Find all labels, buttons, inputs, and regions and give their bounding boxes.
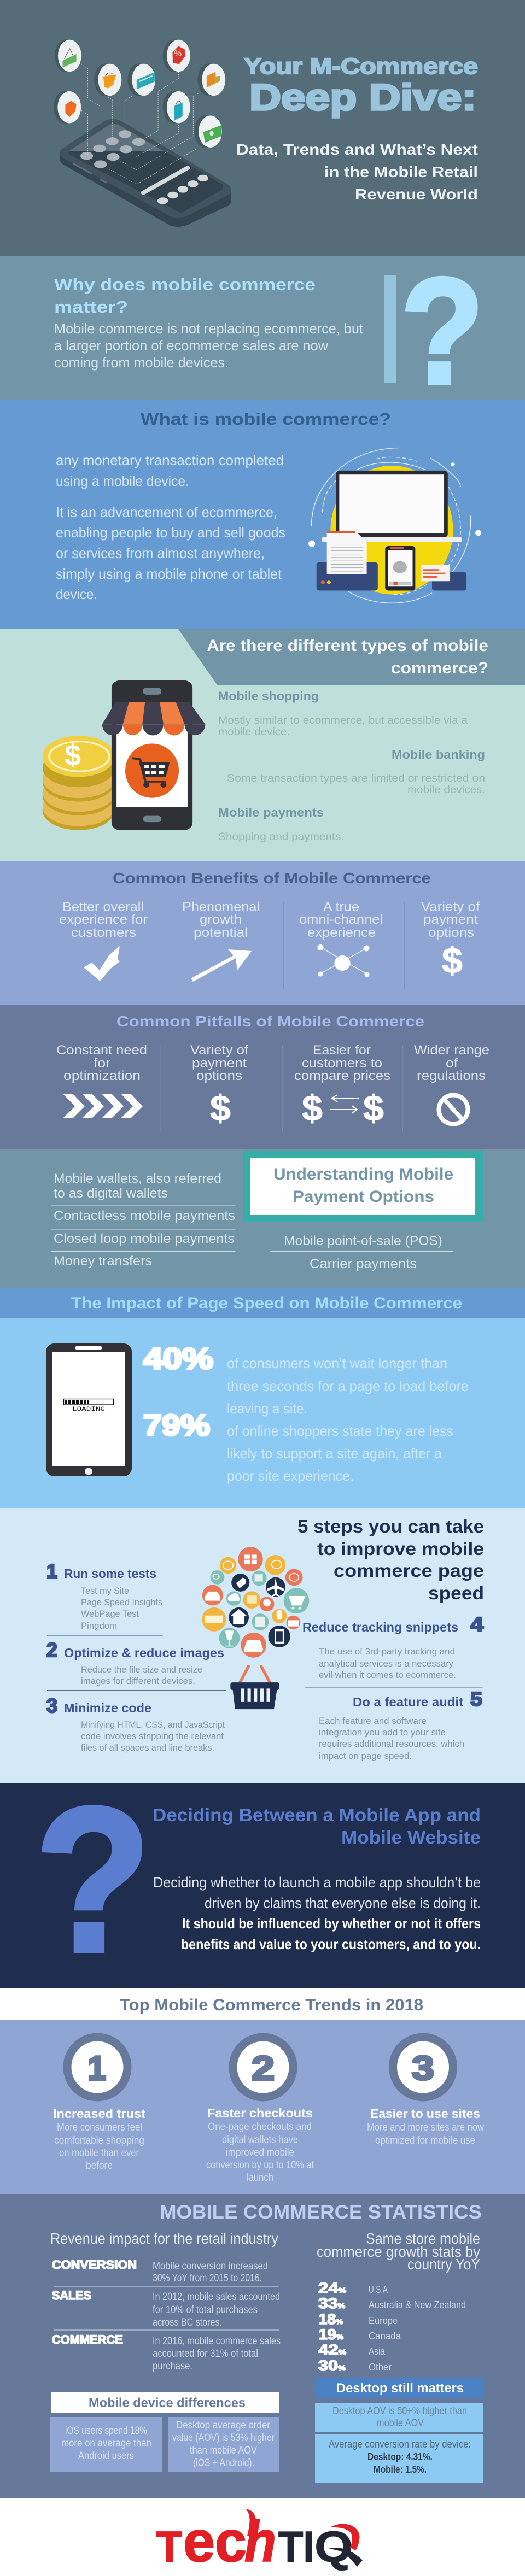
text block: [56, 452, 285, 602]
benefit: growth: [182, 900, 260, 982]
subtitle: [236, 141, 478, 203]
stat: 40%: leaving a site.: [227, 1400, 307, 1417]
benefit: omni-channel: [299, 900, 383, 977]
growth stats by country: commerce growth stats by: [317, 2243, 480, 2260]
subtitle: Data, Trends and What’s Next: [236, 141, 478, 158]
text block: using a mobile device.: [56, 473, 189, 489]
illustration: store phone and coins: $: [65, 739, 81, 772]
heading: What is mobile commerce?: [141, 409, 391, 429]
revenue impact table: accounted for 31% of total: [153, 2348, 258, 2360]
heading: 5 steps you can take: [298, 1516, 484, 1536]
desktop still matters: Desktop still matters: [336, 2381, 464, 2396]
trend 3: 3: [412, 2050, 434, 2087]
heading: Common Pitfalls of Mobile Commerce: [116, 1013, 424, 1030]
item: mobile payments: [218, 806, 344, 843]
growth stats by country: 18%: [318, 2311, 343, 2327]
heading: matter?: [54, 297, 128, 316]
heading banner: Are there different types of mobile: [207, 637, 488, 655]
trend 2: digital wallets have: [222, 2134, 298, 2146]
stat: 79%: poor site experience.: [227, 1468, 354, 1484]
step 1: Pingdom: [81, 1621, 117, 1631]
text block: driven by claims that everyone else is doing it.: [205, 1895, 481, 1911]
pitfall: payment options: Variety of: [190, 1043, 248, 1058]
benefit: payment options: [421, 900, 480, 981]
icon: phone loading: LOADING: [72, 1406, 105, 1413]
trend 2: Faster checkouts: [207, 2106, 313, 2120]
revenue impact table: across BC stores.: [153, 2317, 222, 2328]
benefit: better experience: [59, 900, 148, 981]
step 1: Page Speed Insights: [81, 1597, 162, 1607]
step 4: evil when it comes to ecommerce.: [319, 1670, 456, 1680]
growth stats by country: Other: [369, 2362, 392, 2373]
device differences: [50, 2392, 279, 2472]
step 1: [46, 1560, 163, 1635]
benefit: payment options: payment: [423, 912, 478, 927]
item: mobile banking: [227, 748, 485, 796]
step 5: Do a feature audit: [353, 1695, 463, 1709]
stat: 79%: of online shoppers state they are less: [227, 1423, 453, 1439]
subtitle: in the Mobile Retail: [324, 163, 478, 180]
text block: It should be influenced by whether or not it offers: [182, 1915, 481, 1932]
benefit: omni-channel: experience: [307, 925, 376, 940]
revenue impact table: In 2012, mobile sales accounted: [153, 2291, 280, 2303]
heading: to improve mobile: [317, 1539, 484, 1559]
benefit: better experience: experience for: [59, 912, 148, 927]
heading: commerce page: [334, 1560, 484, 1581]
logo: TechTIQ: T: [156, 2522, 182, 2571]
logo: TechTIQ: TI: [278, 2522, 314, 2571]
text block: enabling people to buy and sell goods: [56, 524, 285, 541]
heading: [153, 1805, 481, 1847]
trend 3: More and more sites are now: [367, 2122, 484, 2133]
revenue impact table: In 2016, mobile commerce sales: [153, 2336, 281, 2347]
item: mobile banking: Mobile banking: [392, 748, 485, 761]
illustration: store phone and coins: [43, 680, 205, 830]
icon: phone loading: [46, 1343, 132, 1476]
step 3: code involves stripping the relevant: [81, 1731, 224, 1741]
trend 3: [367, 2033, 484, 2146]
growth stats by country: Europe: [369, 2315, 398, 2326]
subtitle: Revenue World: [355, 186, 478, 203]
revenue impact table: for 10% of total purchases: [153, 2304, 258, 2316]
heading: Common Benefits of Mobile Commerce: [113, 870, 431, 887]
step 5: Each feature and software: [319, 1716, 427, 1726]
logo: TechTIQ: h: [244, 2509, 276, 2574]
item: mobile shopping: Mostly similar to ecommerce, but accessible via a: [218, 715, 468, 726]
stat: 79%: [143, 1409, 453, 1484]
item: mobile shopping: Mobile shopping: [218, 689, 319, 703]
list: left options: [51, 1171, 235, 1269]
step 5: impact on page speed.: [319, 1751, 412, 1761]
desktop still matters: Mobile: 1.5%.: [374, 2464, 427, 2475]
panel: statistics: [0, 2194, 525, 2498]
benefit: payment options: Variety of: [421, 900, 480, 914]
step 1: Test my Site: [81, 1586, 129, 1596]
text block: a larger portion of ecommerce sales are now: [54, 337, 328, 354]
growth stats by country: Australia & New Zealand: [369, 2299, 466, 2310]
trend 1: Increased trust: [53, 2106, 145, 2121]
heading box: Payment Options: [293, 1188, 434, 1206]
text block: any monetary transaction completed: [56, 452, 284, 468]
trend 2: One-page checkouts and: [208, 2121, 312, 2133]
benefit: growth: Phenomenal: [182, 900, 260, 914]
panel: why does mobile commerce matter: [0, 247, 525, 415]
trend 2: 2: [252, 2050, 275, 2087]
growth stats by country: [317, 2230, 480, 2374]
text block: benefits and value to your customers, and to you.: [181, 1936, 481, 1952]
pitfall: regulations: [414, 1043, 489, 1124]
text block: Mobile commerce is not replacing ecommerce, but: [54, 320, 364, 337]
heading: impact of page speed: [0, 1288, 525, 1318]
step 5: 5: [470, 1688, 482, 1710]
step 2: Reduce the file size and resize: [81, 1664, 202, 1675]
text block: or services from almost anywhere,: [56, 545, 265, 561]
pitfall: compare prices: $: [363, 1088, 384, 1128]
icon: question mark: ?: [35, 1764, 151, 1995]
logo: TechTIQ: Q: [314, 2522, 353, 2571]
growth stats by country: country YoY: [407, 2256, 480, 2273]
text block: [153, 1874, 481, 1952]
logo: TechTIQ: [0, 2498, 525, 2576]
stat: 40%: of consumers won’t wait longer than: [227, 1355, 447, 1371]
list: left options: Money transfers: [54, 1254, 152, 1269]
title: Deep Dive:: [249, 77, 476, 118]
step 2: [46, 1639, 226, 1691]
pitfall: compare prices: Easier for: [313, 1043, 371, 1058]
step 4: The use of 3rd-party tracking and: [319, 1646, 455, 1657]
heading: Mobile Website: [341, 1827, 481, 1847]
heading: impact of page speed: The Impact of Page Speed on Mobile Commerce: [71, 1294, 462, 1312]
heading: [298, 1516, 484, 1603]
item: mobile shopping: mobile device.: [218, 726, 290, 738]
growth stats by country: 24 %: [318, 2280, 347, 2296]
heading box: Understanding Mobile: [273, 1165, 453, 1183]
desktop still matters: Desktop: 4.31%.: [368, 2451, 433, 2462]
panel: trends: [0, 2020, 525, 2194]
list: left options: Contactless mobile payments: [54, 1208, 235, 1223]
step 4: analytical services is a necessary: [319, 1658, 453, 1669]
device differences: value (AOV) is 53% higher: [172, 2432, 275, 2444]
device differences: than mobile AOV: [190, 2445, 257, 2456]
pitfall: regulations: of: [446, 1056, 458, 1071]
panel: header: [0, 0, 525, 256]
pitfall: compare prices: customers to: [302, 1056, 382, 1071]
device differences: (iOS + Android).: [193, 2457, 254, 2469]
list: right options: Mobile point-of-sale (POS): [284, 1234, 442, 1248]
benefit: better experience: customers: [71, 925, 136, 940]
revenue impact table: COMMERCE: [52, 2333, 123, 2346]
heading banner: commerce?: [391, 659, 488, 677]
step 1: Run some tests: [64, 1566, 156, 1581]
heading box: [243, 1151, 483, 1222]
trend 2: conversion by up to 10% at: [206, 2160, 314, 2171]
logo: TechTIQ: ec: [183, 2509, 247, 2574]
text block: simply using a mobile phone or tablet: [56, 566, 282, 582]
trend 1: on mobile than ever: [59, 2147, 139, 2159]
step 3: [46, 1694, 225, 1753]
growth stats by country: 19%: [318, 2326, 343, 2343]
step 2: 2: [46, 1639, 57, 1661]
panel: page speed statistics: [0, 1318, 525, 1508]
panel: common pitfalls: [0, 1005, 525, 1149]
stat: 40%: three seconds for a page to load before: [227, 1378, 469, 1394]
trend 1: comfortable shopping: [54, 2135, 144, 2146]
growth stats by country: 30 %: [318, 2357, 346, 2374]
trend 1: [53, 2033, 145, 2172]
step 5: requires additional resources, which: [319, 1739, 464, 1749]
step 3: Minifying HTML, CSS, and JavaScript: [81, 1720, 225, 1730]
step 4: Reduce tracking snippets: [302, 1620, 458, 1634]
benefit: payment options: $: [442, 940, 463, 981]
pitfall: compare prices: [294, 1043, 390, 1128]
revenue impact table: Mobile conversion increased: [153, 2261, 268, 2272]
device differences: Android users: [78, 2450, 134, 2462]
pitfall: payment options: options: [196, 1069, 242, 1083]
step 3: files of all spaces and line breaks.: [81, 1742, 214, 1753]
text block: [54, 320, 364, 371]
pitfall: optimization: Constant need: [56, 1043, 147, 1058]
item: mobile banking: Some transaction types are limited or restricted on: [227, 773, 485, 784]
item: mobile payments: Shopping and payments.: [218, 831, 344, 843]
list: left options: Mobile wallets, also referred: [54, 1171, 221, 1186]
device differences: iOS users spend 18%: [65, 2425, 147, 2437]
title: [244, 54, 478, 118]
step 1: WebPage Test: [81, 1609, 139, 1619]
pitfall: optimization: [56, 1043, 147, 1118]
list: left options: to as digital wallets: [54, 1186, 168, 1201]
revenue impact table: 30% YoY from 2015 to 2016.: [153, 2273, 262, 2284]
pitfall: optimization: for: [94, 1056, 110, 1071]
step 3: 3: [46, 1694, 57, 1717]
trend 2: [206, 2033, 314, 2184]
trend 2: launch: [247, 2172, 273, 2184]
heading: Why does mobile commerce: [54, 275, 316, 294]
list: left options: Closed loop mobile payments: [54, 1231, 235, 1246]
growth stats by country: Asia: [369, 2346, 386, 2357]
growth stats by country: Same store mobile: [366, 2230, 480, 2247]
revenue impact table: SALES: [52, 2289, 91, 2302]
text block: Deciding whether to launch a mobile app shouldn’t be: [153, 1874, 481, 1891]
panel: common benefits: [0, 861, 525, 1005]
icon: question mark: ?: [401, 247, 484, 415]
stat: 79%: likely to support a site again, after a: [227, 1445, 442, 1462]
stat: 79%: 79%: [143, 1409, 210, 1442]
pitfall: payment options: [190, 1043, 248, 1128]
illustration: phone with shopping icons: %: [174, 49, 182, 58]
trend 2: improved mobile: [226, 2147, 294, 2158]
heading: top trends: Top Mobile Commerce Trends in 2018: [120, 1996, 423, 2014]
revenue impact table: [50, 2230, 281, 2372]
revenue impact table: CONVERSION: [52, 2258, 137, 2272]
trend 3: Easier to use sites: [370, 2106, 480, 2121]
list: right options: [270, 1234, 453, 1271]
step 5: integration you add to your site: [319, 1727, 446, 1738]
trend 1: before: [86, 2160, 113, 2172]
panel: deciding between app and website: [0, 1764, 525, 1995]
pitfall: regulations: Wider range: [414, 1043, 489, 1058]
panel: what is mobile commerce: [0, 400, 525, 629]
pitfall: optimization: optimization: [63, 1069, 141, 1083]
stat: 40%: [143, 1342, 469, 1417]
step 5: [319, 1688, 482, 1761]
trend 1: More consumers feel: [57, 2122, 142, 2133]
illustration: devices: [308, 448, 481, 603]
item: mobile banking: mobile devices.: [407, 784, 485, 796]
desktop still matters: Average conversion rate by device:: [329, 2439, 471, 2450]
desktop still matters: Desktop AOV is 50+% higher than: [332, 2405, 467, 2417]
step 3: Minimize code: [64, 1701, 151, 1715]
panel: payment options: [0, 1149, 525, 1288]
device differences: more on average than: [61, 2438, 151, 2449]
step 4: 4: [470, 1613, 483, 1635]
pitfall: compare prices: compare prices: [294, 1069, 390, 1083]
text block: coming from mobile devices.: [54, 354, 229, 371]
panel: five steps: [0, 1508, 525, 1783]
growth stats by country: U.S.A: [369, 2284, 388, 2295]
pitfall: compare prices: $: [302, 1088, 323, 1128]
item: mobile shopping: [218, 689, 468, 738]
benefit: omni-channel: A true: [323, 900, 359, 914]
benefit: growth: potential: [194, 925, 248, 940]
step 4: [302, 1613, 483, 1688]
heading: speed: [428, 1583, 484, 1603]
title: Your M-Commerce: [244, 54, 478, 79]
desktop still matters: mobile AOV: [377, 2417, 424, 2429]
step 1: 1: [46, 1560, 57, 1582]
stat: 40%: 40%: [143, 1342, 213, 1375]
revenue impact table: purchase.: [153, 2361, 192, 2372]
heading banner: [178, 629, 525, 685]
growth stats by country: 33 %: [318, 2295, 346, 2311]
heading: Deciding Between a Mobile App and: [153, 1805, 481, 1825]
list: right options: Carrier payments: [310, 1257, 417, 1271]
heading: top trends: [0, 1988, 525, 2020]
pitfall: payment options: $: [210, 1088, 231, 1128]
text block: device.: [56, 586, 97, 602]
pitfall: regulations: regulations: [417, 1069, 486, 1083]
panel: types of mobile commerce: [0, 629, 525, 861]
item: mobile payments: Mobile payments: [218, 806, 324, 819]
benefit: growth: growth: [200, 912, 242, 927]
pitfall: payment options: payment: [192, 1056, 247, 1071]
revenue impact table: Revenue impact for the retail industry: [50, 2230, 278, 2247]
step 2: Optimize & reduce images: [64, 1646, 224, 1660]
text block: It is an advancement of ecommerce,: [56, 504, 277, 520]
heading: MOBILE COMMERCE STATISTICS: [160, 2202, 482, 2223]
growth stats by country: Canada: [369, 2331, 401, 2342]
growth stats by country: 42 %: [318, 2342, 347, 2358]
device differences: Desktop average order: [176, 2420, 271, 2431]
benefit: better experience: Better overall: [62, 900, 144, 914]
benefit: payment options: options: [428, 925, 474, 940]
trend 3: optimized for mobile use: [375, 2135, 475, 2146]
illustration: icon tree and basket: [202, 1547, 309, 1709]
trend 1: 1: [88, 2050, 106, 2087]
heading: [54, 275, 316, 316]
illustration: phone with shopping icons: [54, 39, 231, 227]
benefit: omni-channel: omni-channel: [299, 912, 383, 927]
device differences: Mobile device differences: [89, 2396, 246, 2410]
desktop still matters: [315, 2378, 483, 2483]
step 2: images for different devices.: [81, 1676, 195, 1686]
